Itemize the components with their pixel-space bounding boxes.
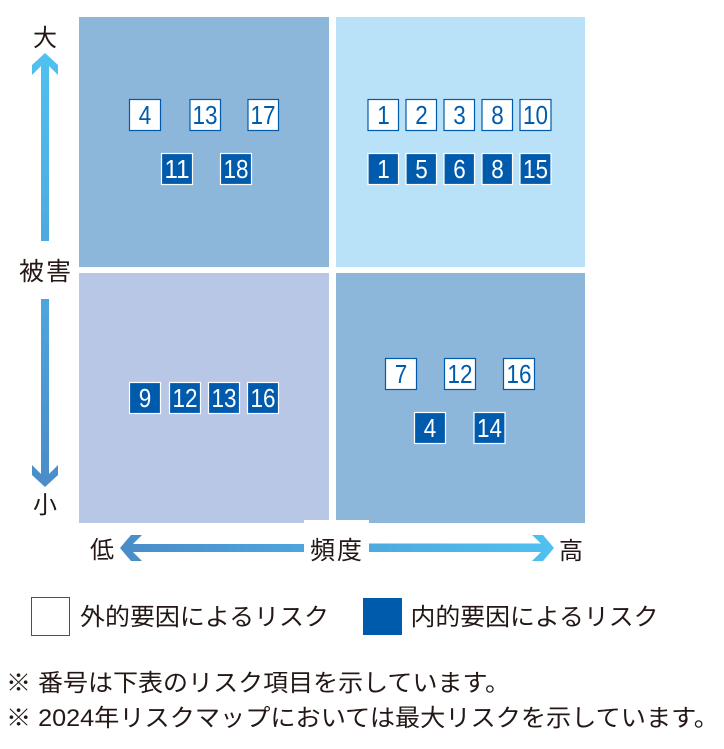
external risk 8: [482, 100, 512, 130]
external risk 3: 3: [453, 102, 466, 130]
external risk 4: 4: [139, 102, 151, 130]
external risk 2: [406, 100, 436, 130]
panel: high damage, low frequency: [79, 17, 329, 267]
legend: internal risk: 内的要因によるリスク: [410, 604, 658, 631]
internal risk 8: [482, 154, 512, 184]
internal risk 5: 5: [415, 156, 428, 184]
external risk 7: [386, 358, 416, 390]
label: small: 小: [33, 492, 57, 519]
footnote 2: ※ 2024年リスクマップにおいては最大リスクを示しています。: [6, 705, 719, 732]
internal risk 9: [130, 382, 160, 414]
internal risk 4: [414, 412, 446, 444]
panel: low damage, low frequency: [79, 273, 329, 523]
label: low: 低: [90, 537, 114, 564]
label: frequency: 頻度: [310, 537, 362, 565]
legend: internal risk: [363, 598, 658, 635]
external risk 3: [444, 100, 474, 130]
internal risk 8: 8: [491, 156, 504, 184]
external risk 1: [368, 100, 398, 130]
external risk 7: 7: [395, 361, 407, 389]
arrow: frequency high: [369, 535, 554, 561]
footnote 1: ※ 番号は下表のリスク項目を示しています。: [6, 670, 510, 697]
internal risk 5: [406, 154, 436, 184]
internal risk 13: 13: [212, 385, 236, 413]
internal risk 4: 4: [424, 415, 436, 443]
legend: external risk: 外的要因によるリスク: [80, 604, 329, 631]
arrow: damage down: [32, 299, 58, 487]
panel: high damage, high frequency: [336, 17, 585, 267]
external risk 12: 12: [448, 361, 472, 389]
external risk 16: 16: [506, 361, 532, 389]
arrow: damage up: [32, 53, 58, 241]
internal risk 14: 14: [477, 415, 502, 443]
external risk 8: 8: [491, 102, 504, 130]
external risk 1: 1: [377, 102, 390, 130]
internal risk 1: 1: [377, 156, 390, 184]
internal risk 1: [368, 154, 398, 184]
internal risk 6: 6: [453, 156, 466, 184]
external risk 10: 10: [523, 102, 548, 130]
internal risk 6: [444, 154, 474, 184]
legend: external risk: [32, 598, 329, 636]
external risk 13: 13: [192, 102, 218, 130]
internal risk 16: 16: [250, 385, 276, 413]
external risk 2: 2: [415, 102, 428, 130]
internal risk 12: 12: [172, 385, 198, 413]
panel: low damage, high frequency: [336, 273, 585, 523]
label: damage: 被害: [19, 258, 71, 286]
label: large: 大: [33, 25, 57, 52]
internal risk 15: 15: [523, 156, 548, 184]
label: high: 高: [559, 538, 583, 565]
internal risk 18: 18: [224, 156, 248, 184]
arrow: frequency low: [120, 535, 304, 561]
external risk 4: [130, 100, 160, 130]
external risk 17: 17: [250, 102, 276, 130]
internal risk 11: 11: [164, 156, 190, 184]
internal risk 9: 9: [139, 385, 151, 413]
